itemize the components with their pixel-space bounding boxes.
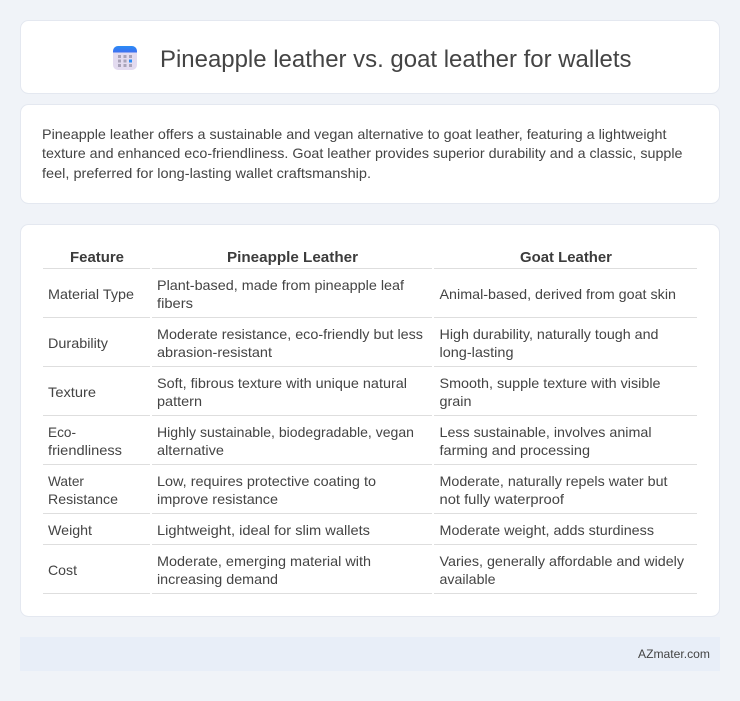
- row: water resistance: [48, 473, 668, 507]
- row: durability: long-lasting: [440, 344, 514, 360]
- row: material type: Material Type: [48, 286, 134, 302]
- row: water resistance: Resistance: [48, 491, 118, 507]
- row: weight: Moderate weight, adds sturdiness: [440, 522, 654, 538]
- row: water resistance: Moderate, naturally repels water but: [440, 473, 668, 489]
- row: texture: pattern: [157, 393, 202, 409]
- table header: [70, 249, 612, 266]
- row: eco-friendliness: farming and processing: [440, 442, 590, 458]
- panel: summary card: [20, 104, 720, 204]
- row: eco-friendliness: Less sustainable, involves animal: [440, 424, 652, 440]
- panel: title card: [20, 20, 720, 94]
- row: material type: Animal-based, derived from goat skin: [440, 286, 676, 302]
- row: cost: Moderate, emerging material with: [157, 553, 371, 569]
- row: weight: Weight: [48, 522, 92, 538]
- row: texture: grain: [440, 393, 472, 409]
- title: Pineapple leather vs. goat leather for wallets: [160, 46, 632, 73]
- row: eco-friendliness: Highly sustainable, biodegradable, vegan: [157, 424, 414, 440]
- row: water resistance: improve resistance: [157, 491, 278, 507]
- row: texture: Soft, fibrous texture with unique natural: [157, 375, 407, 391]
- row: cost: increasing demand: [157, 571, 278, 587]
- row: cost: [48, 553, 684, 587]
- row: material type: fibers: [157, 295, 193, 311]
- row: eco-friendliness: Eco-: [48, 424, 76, 440]
- row: cost: Varies, generally affordable and widely: [440, 553, 684, 569]
- footer: AZmater.com: [638, 647, 710, 661]
- table header: Pineapple Leather: [227, 249, 358, 266]
- row: eco-friendliness: alternative: [157, 442, 224, 458]
- row: cost: Cost: [48, 562, 77, 578]
- row: texture: Texture: [48, 384, 96, 400]
- row: weight: [48, 522, 654, 538]
- panel: comparison table: [20, 224, 720, 616]
- row: durability: High durability, naturally tough and: [440, 326, 658, 342]
- row: durability: Durability: [48, 335, 108, 351]
- row: weight: Lightweight, ideal for slim wallets: [157, 522, 370, 538]
- row: eco-friendliness: friendliness: [48, 442, 122, 458]
- row: texture: [48, 375, 661, 409]
- footer: [20, 637, 720, 671]
- row: eco-friendliness: [48, 424, 652, 458]
- row: texture: Smooth, supple texture with visible: [440, 375, 661, 391]
- row: material type: [48, 277, 676, 311]
- row: durability: [48, 326, 658, 360]
- row: water resistance: not fully waterproof: [440, 491, 564, 507]
- table header: Goat Leather: [520, 249, 612, 266]
- summary text: feel, preferred for long-lasting wallet craftsmanship.: [42, 165, 371, 181]
- row: material type: Plant-based, made from pineapple leaf: [157, 277, 404, 293]
- row: durability: abrasion-resistant: [157, 344, 272, 360]
- table header: Feature: [70, 249, 124, 266]
- summary text: [42, 126, 683, 181]
- row: durability: Moderate resistance, eco-friendly but less: [157, 326, 423, 342]
- summary text: Pineapple leather offers a sustainable and vegan alternative to goat leather, featuring a lightweight: [42, 126, 667, 142]
- row: cost: available: [440, 571, 496, 587]
- icon: calendar: [113, 46, 137, 70]
- row: water resistance: Water: [48, 473, 84, 489]
- row: water resistance: Low, requires protective coating to: [157, 473, 376, 489]
- summary text: texture and enhanced eco-friendliness. Goat leather provides superior durability and a classic, supple: [42, 145, 683, 161]
